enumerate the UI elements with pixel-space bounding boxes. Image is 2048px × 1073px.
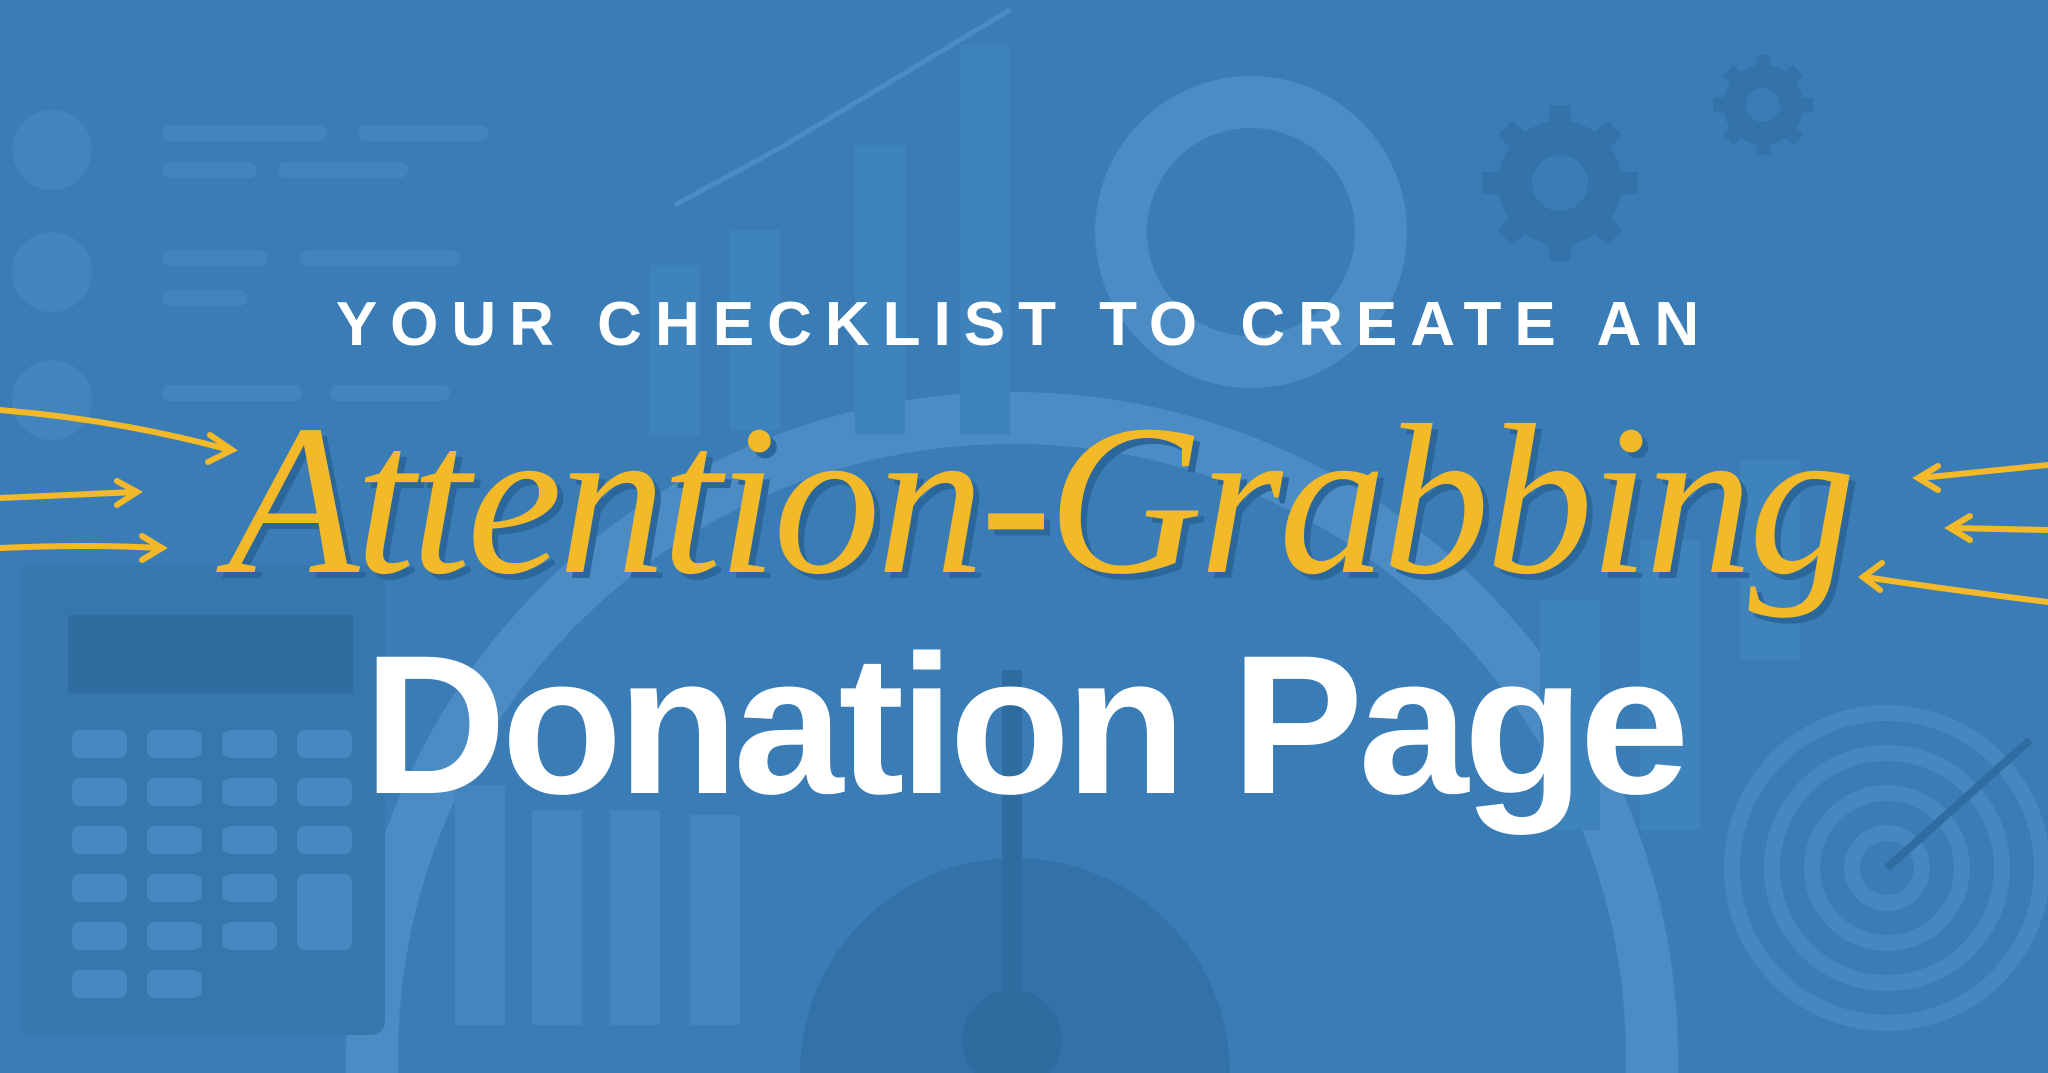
right arrows bbox=[1863, 465, 2048, 602]
gears bbox=[1482, 55, 1813, 261]
title: subtitle line: YOUR CHECKLIST TO CREATE AN bbox=[336, 290, 1712, 359]
calculator bbox=[20, 565, 385, 1035]
checklist bbox=[12, 110, 488, 440]
line chart bbox=[675, 10, 1010, 205]
title: script headline: Attention-Grabbing bbox=[228, 380, 1852, 619]
donut bbox=[1121, 102, 1381, 362]
bar chart top bbox=[650, 45, 1010, 435]
title: main headline: Donation Page bbox=[363, 614, 1685, 835]
gauge arc bbox=[372, 418, 1652, 1073]
right bars bbox=[1540, 460, 1800, 830]
target bbox=[1732, 713, 2042, 1023]
left arrows bbox=[0, 410, 232, 560]
bottom bars bbox=[455, 785, 740, 1025]
gauge inner bbox=[800, 670, 1230, 1073]
